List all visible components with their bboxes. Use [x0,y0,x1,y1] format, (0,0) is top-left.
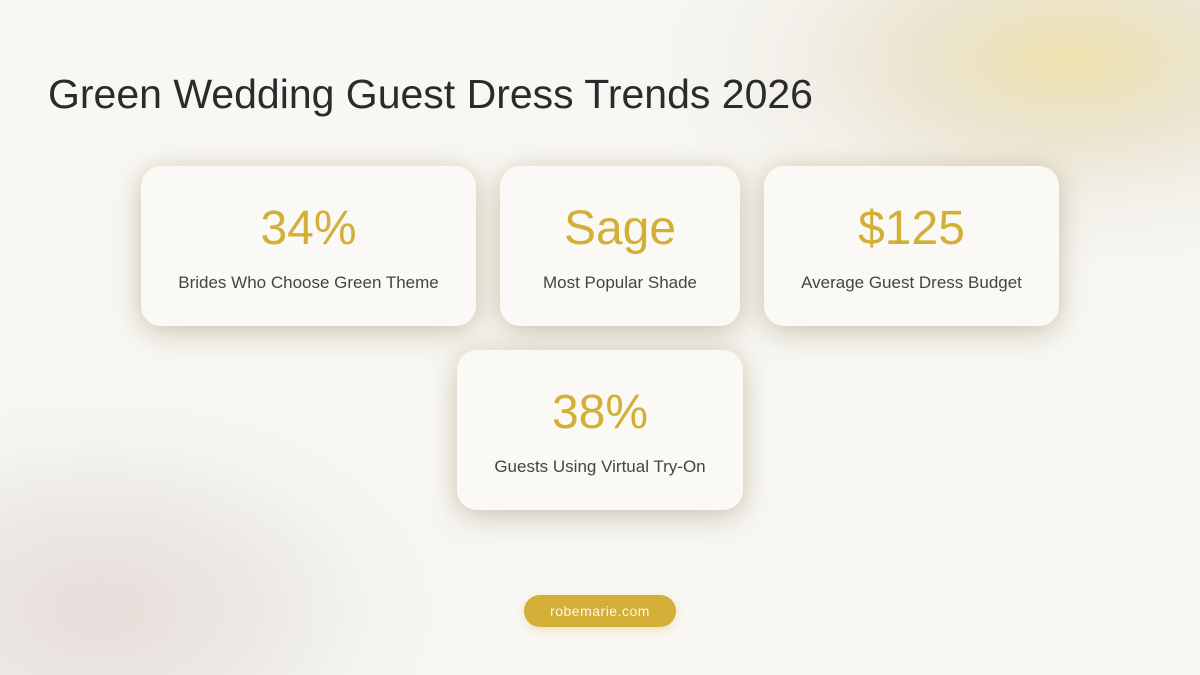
stat number: 34% [260,202,357,255]
stat label: Guests Using Virtual Try-On [494,457,706,476]
footer pill: robemarie.com [550,603,650,619]
footer pill [524,595,676,627]
stat label: Most Popular Shade [543,273,697,292]
card: brides green theme [141,166,476,326]
stat label: Average Guest Dress Budget [801,273,1022,292]
card: budget [764,166,1059,326]
stat number: $125 [858,202,965,255]
stat number: 38% [552,386,648,439]
stat number: Sage [564,202,676,255]
title: Green Wedding Guest Dress Trends 2026 [48,71,813,117]
card: virtual try-on [457,350,743,510]
card: popular shade [500,166,740,326]
stat label: Brides Who Choose Green Theme [178,273,439,292]
